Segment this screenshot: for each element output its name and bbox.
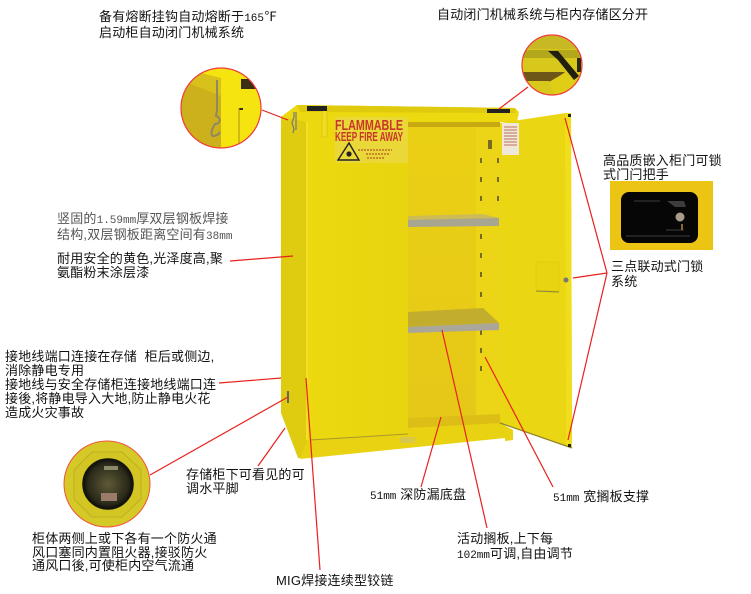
cabinet side panel bbox=[281, 105, 308, 458]
text: steel construction: 结构,双层钢板距离空间有38mm bbox=[57, 227, 232, 243]
text: steel construction bbox=[57, 211, 232, 243]
text: hinge: MIG焊接连续型铰链 bbox=[276, 573, 394, 588]
text: leveling feet: 存储柜下可看见的可 bbox=[186, 467, 305, 482]
fusible link hook bbox=[292, 112, 296, 133]
ground lug bbox=[287, 391, 289, 403]
safety label bbox=[335, 117, 408, 163]
text: three-point lock bbox=[611, 259, 703, 289]
text: fire vents bbox=[32, 531, 217, 573]
text: powder coat bbox=[57, 251, 223, 280]
text: fusible link: 备有熔断挂钩自动熔断于165℉ bbox=[99, 9, 277, 25]
text: fusible link: 启动柜自动闭门机械系统 bbox=[99, 25, 244, 40]
text: leveling feet: 调水平脚 bbox=[186, 481, 239, 496]
lock fittings bbox=[564, 278, 568, 282]
hinges bbox=[307, 106, 327, 111]
door tab bracket bbox=[536, 262, 559, 291]
text: leveling feet bbox=[186, 467, 305, 496]
text: adjustable shelf: 102mm可调,自由调节 bbox=[457, 546, 573, 562]
cabinet base bbox=[300, 423, 513, 459]
text: fire vents: 柜体两侧上或下各有一个防火通 bbox=[32, 531, 217, 546]
text: door handle: 式门闩把手 bbox=[603, 167, 669, 182]
safety label: KEEP FIRE AWAY bbox=[335, 129, 403, 144]
text: three-point lock: 三点联动式门锁 bbox=[611, 259, 703, 274]
cabinet top bbox=[281, 105, 519, 122]
text: spill sump: 51mm 深防漏底盘 bbox=[370, 487, 466, 503]
text: steel construction: 竖固的1.59mm厚双层钢板焊接 bbox=[57, 211, 229, 227]
detail: recessed door handle bbox=[610, 181, 713, 250]
upper shelf bbox=[408, 214, 499, 227]
text: grounding: 消除静电专用 bbox=[5, 363, 84, 378]
text: grounding bbox=[5, 349, 216, 420]
text: grounding: 接地线端口连接在存储 柜后或侧边, bbox=[5, 349, 214, 364]
lower shelf bbox=[408, 308, 499, 333]
text: fire vents: 风口塞同内置阻火器,接驳防火 bbox=[32, 544, 207, 560]
text: powder coat: 耐用安全的黄色,光泽度高,聚 bbox=[57, 251, 223, 266]
base marking bbox=[400, 437, 415, 443]
cabinet illustration with callout circles and leader lines bbox=[64, 34, 713, 570]
text: three-point lock: 系统 bbox=[611, 274, 637, 289]
text: shelf support: 51mm 宽搁板支撑 bbox=[553, 489, 649, 505]
leader lines bbox=[150, 87, 607, 570]
cabinet interior bbox=[408, 122, 500, 428]
detail circle: fire vent bbox=[64, 441, 150, 527]
right door bbox=[500, 113, 572, 448]
cabinet bbox=[281, 105, 572, 459]
compliance sticker bbox=[502, 123, 519, 155]
detail circle: self-closing mechanism bbox=[522, 35, 582, 96]
safety label: FLAMMABLE bbox=[335, 117, 403, 134]
text: adjustable shelf bbox=[457, 531, 573, 562]
text: grounding: 造成火灾事故 bbox=[5, 405, 84, 420]
text: grounding: 接後,将静电导入大地,防止静电火花 bbox=[5, 391, 211, 406]
text: fire vents: 通风口後,可使柜内空气流通 bbox=[32, 558, 194, 573]
text: powder coat: 氨酯粉末涂层漆 bbox=[57, 265, 149, 280]
text: door handle bbox=[603, 153, 722, 182]
left door bbox=[306, 107, 408, 440]
detail circle: fusible link hook bbox=[181, 68, 261, 148]
text: self-closing mechanism: 自动闭门机械系统与柜内存储区分开 bbox=[437, 7, 648, 22]
door handle bar bbox=[322, 107, 327, 137]
text: adjustable shelf: 活动搁板,上下每 bbox=[457, 531, 553, 546]
text: fusible link bbox=[99, 9, 277, 40]
shelf peg slots bbox=[480, 140, 499, 371]
text: door handle: 高品质嵌入柜门可锁 bbox=[603, 153, 722, 168]
text: grounding: 接地线与安全存储柜连接地线端口连 bbox=[5, 377, 216, 392]
